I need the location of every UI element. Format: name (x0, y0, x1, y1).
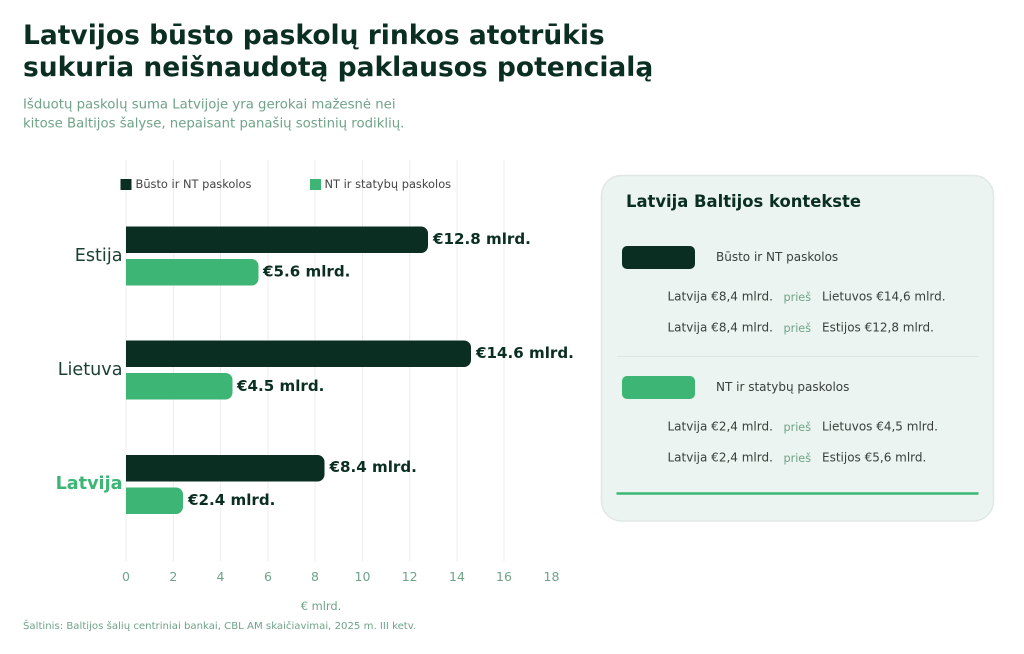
title: Latvijos būsto paskolų rinkos atotrūkis (23, 20, 605, 51)
row: Estija: €5.6 mlrd. (262, 262, 350, 280)
section: construction loans (622, 376, 938, 465)
x axis: 6 (264, 569, 272, 584)
title: sukuria neišnaudotą paklausos potencialą (23, 52, 653, 83)
row: Lietuva: €14.6 mlrd. (475, 344, 574, 362)
subtitle (23, 96, 404, 132)
section: housing loans: Lietuvos €14,6 mlrd. (822, 290, 946, 304)
row: Estija: Estija (75, 246, 122, 266)
x axis: 16 (496, 569, 512, 584)
section: housing loans (622, 246, 946, 335)
bar chart (56, 160, 574, 613)
panel: Latvija Baltijos kontekste (602, 176, 994, 521)
section: construction loans: prieš (784, 452, 811, 465)
row: Lietuva: Lietuva (58, 360, 122, 380)
x axis: 2 (169, 569, 177, 584)
section: housing loans: prieš (784, 322, 811, 335)
row: Latvija (56, 455, 417, 514)
section: housing loans: Estijos €12,8 mlrd. (822, 320, 934, 334)
title (23, 20, 653, 83)
section: construction loans: Latvija €2,4 mlrd. (668, 450, 773, 464)
source note: Šaltinis: Baltijos šalių centriniai bankai, CBL AM skaičiavimai, 2025 m. III ketv. (23, 619, 416, 632)
section: construction loans: Latvija €2,4 mlrd. (668, 420, 773, 434)
x axis: 12 (402, 569, 418, 584)
legend: NT ir statybų paskolos (324, 177, 451, 191)
subtitle: kitose Baltijos šalyse, nepaisant panašių sostinių rodiklių. (23, 116, 404, 132)
row: Estija: €12.8 mlrd. (432, 230, 531, 248)
section: construction loans: NT ir statybų paskolos (716, 380, 849, 394)
x axis: 4 (217, 569, 225, 584)
x axis (122, 569, 559, 613)
legend: Būsto ir NT paskolos (136, 177, 252, 191)
row: Latvija: €2.4 mlrd. (187, 491, 275, 509)
x axis: 10 (355, 569, 370, 584)
row: Latvija: Latvija (56, 474, 122, 494)
section: construction loans: Lietuvos €4,5 mlrd. (822, 420, 938, 434)
section: housing loans: Būsto ir NT paskolos (716, 250, 838, 264)
subtitle: Išduotų paskolų suma Latvijoje yra gerokai mažesnė nei (23, 96, 396, 112)
x axis: 14 (449, 569, 465, 584)
row: Lietuva (58, 340, 574, 400)
panel heading: Latvija Baltijos kontekste (626, 192, 861, 211)
legend (120, 177, 451, 191)
row: Lietuva: €4.5 mlrd. (236, 377, 324, 395)
section: construction loans: prieš (784, 421, 811, 434)
section: construction loans: Estijos €5,6 mlrd. (822, 450, 926, 464)
row: Latvija: €8.4 mlrd. (328, 458, 417, 476)
x axis: 8 (311, 569, 319, 584)
section: housing loans: Latvija €8,4 mlrd. (668, 290, 773, 304)
x axis: 18 (544, 569, 559, 584)
x axis: 0 (122, 569, 130, 584)
section: housing loans: prieš (784, 291, 811, 304)
row: Estija (75, 226, 531, 286)
section: housing loans: Latvija €8,4 mlrd. (668, 320, 773, 334)
x axis: € mlrd. (301, 599, 341, 613)
